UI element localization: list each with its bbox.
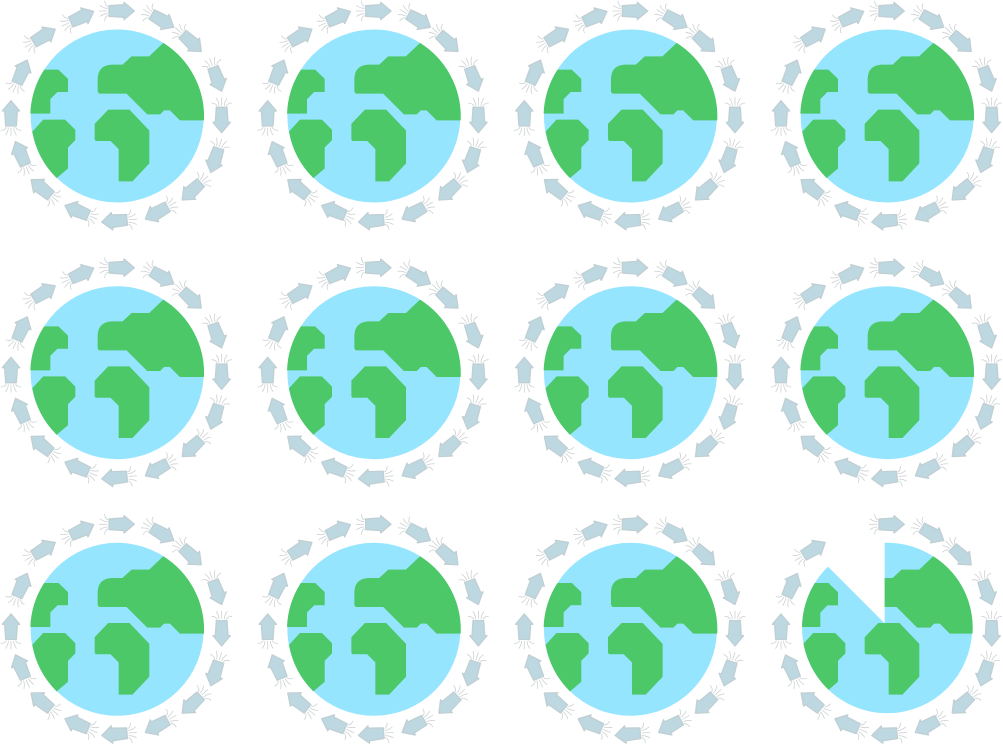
globe xyxy=(287,29,460,202)
earth unit: row 3 column 2 xyxy=(258,514,488,745)
globe xyxy=(287,543,460,716)
arrow ring xyxy=(771,1,1002,232)
arrow ring xyxy=(771,258,1002,489)
globe xyxy=(287,286,460,459)
arrow ring xyxy=(1,258,232,489)
earth unit: row 2 column 1 xyxy=(1,258,232,489)
globe xyxy=(544,286,717,459)
earth unit: row 1 column 3 xyxy=(514,1,745,232)
earth unit: row 3 column 3 xyxy=(514,514,745,745)
arrow ring xyxy=(514,1,745,232)
globe xyxy=(31,29,204,202)
globe xyxy=(801,29,974,202)
partial globe xyxy=(801,543,974,713)
arrow ring xyxy=(514,514,745,745)
earth unit: row 2 column 2 xyxy=(258,258,488,489)
earth unit: row 1 column 1 xyxy=(1,1,232,232)
arrow ring xyxy=(1,1,232,232)
globe xyxy=(544,29,717,202)
earth unit: row 2 column 3 xyxy=(514,258,745,489)
arrow ring with one arrow missing xyxy=(771,514,1002,745)
arrow ring xyxy=(258,258,488,489)
earth unit: row 3 column 1 xyxy=(1,514,232,745)
globe xyxy=(801,286,974,459)
earth unit: row 1 column 2 xyxy=(258,1,488,232)
arrow ring xyxy=(514,258,745,489)
arrow ring xyxy=(258,514,488,745)
earth unit: row 2 column 4 xyxy=(771,258,1002,489)
arrow ring xyxy=(258,1,488,232)
globe xyxy=(31,543,204,716)
globe xyxy=(544,543,717,716)
earth unit: row 1 column 4 xyxy=(771,1,1002,232)
globe xyxy=(31,286,204,459)
earth unit: row 3 column 4, partial globe with wedge removed xyxy=(771,514,1002,745)
arrow ring xyxy=(1,514,232,745)
